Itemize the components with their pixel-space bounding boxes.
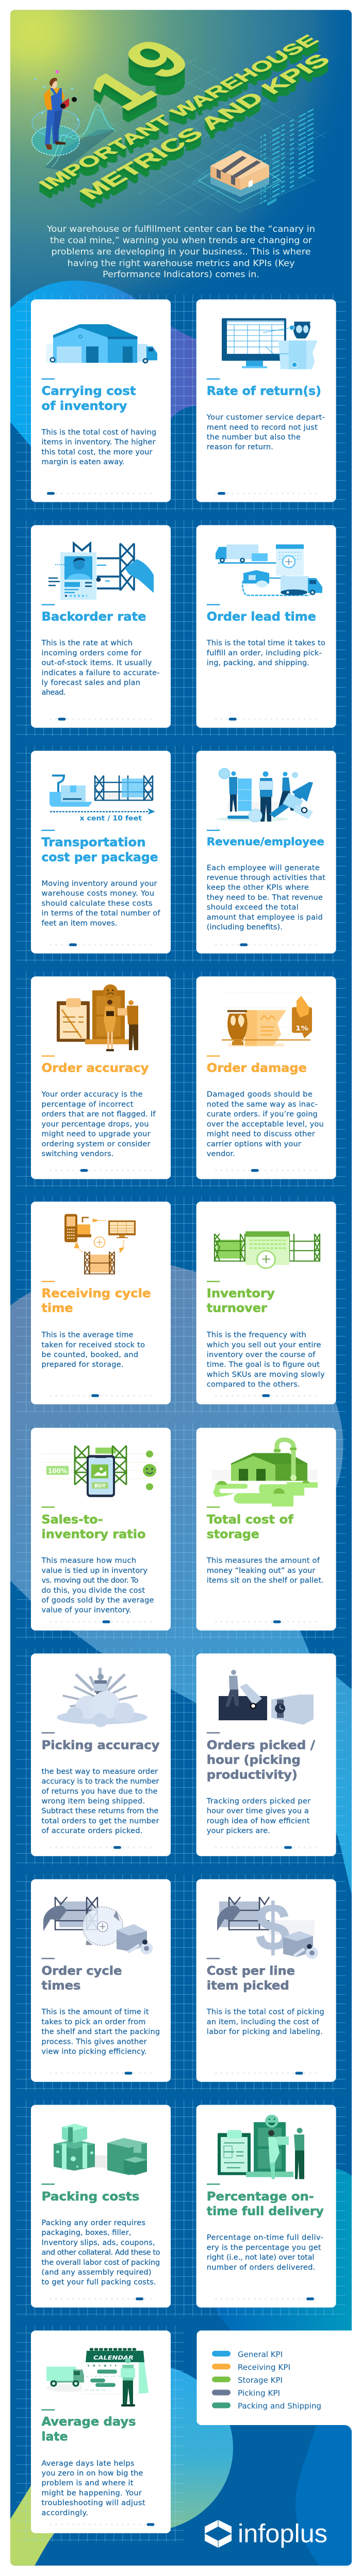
body text <box>207 1091 324 1158</box>
progress dots <box>51 2072 151 2075</box>
body text <box>41 1091 156 1158</box>
body text: total orders to get the number <box>41 1817 159 1825</box>
icon: worker with hand truck and wristwatch <box>219 1670 314 1725</box>
progress dots <box>51 1169 151 1172</box>
heading <box>207 1286 275 1315</box>
body text: Moving inventory around your <box>41 880 157 888</box>
body text: ment need to record not just <box>207 423 318 432</box>
intro text: Your warehouse or fulfillment center can be the “canary in <box>46 224 315 234</box>
body text <box>206 1557 324 1585</box>
card: order cycle times <box>31 1879 171 2082</box>
icon: truck, calendar and worker: 4 7 8 9 10 11 12 <box>86 2375 123 2378</box>
heading: inventory ratio <box>41 1527 145 1541</box>
body text: indicates a failure to accurate- <box>41 669 160 677</box>
body text <box>41 1331 145 1369</box>
body text: in terms of the total number of <box>41 909 160 918</box>
body text: the best way to measure order <box>41 1768 158 1776</box>
heading <box>207 2189 324 2218</box>
body text: Damaged goods should be <box>207 1091 313 1099</box>
progress dots <box>216 2072 316 2075</box>
body text: of returns you have due to the <box>41 1788 158 1795</box>
body text: time. The goal is to figure out <box>207 1361 320 1369</box>
body text: which SKUs are moving slowly <box>207 1371 325 1379</box>
body text: an item, including the cost of <box>207 2018 319 2026</box>
heading: Cost per line <box>207 1963 295 1978</box>
body text: This is the total cost of having <box>41 429 156 436</box>
body text: process. This gives another <box>41 2038 147 2046</box>
title block: 19 <box>69 27 209 121</box>
heading: Average days <box>41 2414 136 2429</box>
body text: orders that are not flagged. If <box>41 1110 156 1118</box>
progress dots <box>216 492 316 495</box>
body text: warehouse costs money. You <box>41 890 154 898</box>
legend <box>197 2331 361 2432</box>
illustration: pallet of boxes <box>192 144 315 212</box>
intro text: the coal mine,” warning you when trends are changing or <box>50 235 313 246</box>
icon: truck, calendar and worker: 27 28 29 30 <box>85 2389 105 2392</box>
body text: This measures the amount of <box>206 1557 320 1565</box>
body text: the number but also the <box>207 433 301 442</box>
body text: feet an item moves. <box>41 920 118 927</box>
legend: Packing and Shipping <box>238 2401 321 2411</box>
body text: out-of-stock items. It usually <box>41 659 152 667</box>
icon: rack, dollar sign and box: $ <box>255 1890 290 1965</box>
body text <box>41 2219 160 2286</box>
icon: clipboard, door and delivery <box>57 985 138 1051</box>
icon: gift boxes and cartons <box>54 2124 147 2175</box>
progress dots <box>51 943 151 946</box>
progress dots <box>51 1846 151 1849</box>
body text: This is the amount of time it <box>41 2008 149 2016</box>
progress dots <box>216 1394 316 1397</box>
body text: revenue through activities that <box>207 874 325 882</box>
card: orders picked per hour <box>196 1653 336 1856</box>
body text: curate orders. if you’re going <box>207 1110 318 1118</box>
heading: Transportation <box>41 835 145 850</box>
icon: broken vase, box and 1% marker: 1% <box>296 1025 308 1032</box>
body text: value of your inventory. <box>41 1606 131 1615</box>
body text: accuracy is to track the number <box>41 1777 159 1786</box>
heading <box>41 835 158 864</box>
progress dots <box>47 492 151 495</box>
body text: Your order accuracy is the <box>41 1091 143 1099</box>
heading: Order lead time <box>207 609 316 623</box>
body text: accordingly. <box>41 2509 88 2517</box>
heading: item picked <box>207 1978 289 1993</box>
body text: should exceed the total <box>207 904 299 912</box>
body text: percentage of incorrect <box>41 1100 134 1109</box>
body text: Average days late helps <box>41 2460 134 2468</box>
card: backorder rate <box>31 525 171 728</box>
heading: productivity) <box>207 1768 298 1782</box>
body text: over the acceptable level, you <box>207 1121 324 1128</box>
body text: inventory over the course of <box>207 1351 316 1359</box>
body text: might be happening. Your <box>41 2489 142 2497</box>
body text <box>41 880 160 927</box>
body text: vendor. <box>207 1150 235 1158</box>
card: packing costs <box>31 2105 171 2308</box>
body text: ly forecast sales and plan <box>41 679 140 687</box>
heading: Picking accuracy <box>41 1738 160 1752</box>
body text: prepared for storage. <box>41 1361 124 1369</box>
body text: fulfill an order, including pick- <box>207 649 322 657</box>
icon: rack, ID card and hand <box>48 544 154 600</box>
card: average days late <box>31 2331 171 2533</box>
heading: Total cost of <box>207 1512 294 1527</box>
intro text: problems are developing in your business.. This is where <box>52 247 310 257</box>
body text: This is the total time it takes to <box>206 639 325 648</box>
card: order damage <box>196 976 336 1179</box>
body text: your percentage drops, you <box>41 1121 149 1128</box>
icon: rack, phone, 100% tag and faces: 100% <box>48 1467 67 1475</box>
body text: This is the rate at which <box>41 639 133 648</box>
title: metrics and kpis: METRICS AND KPIS <box>74 50 336 203</box>
body text: and other collateral. Add these to <box>41 2249 160 2257</box>
card: order lead time <box>196 525 336 728</box>
heading: Packing costs <box>41 2189 139 2204</box>
progress dots <box>216 2297 316 2300</box>
icon: scanner, monitor and rack cycle <box>64 1214 136 1274</box>
body text: compared to the others. <box>207 1381 300 1389</box>
intro text <box>46 224 315 280</box>
icon: worker on cloud with rays <box>57 1668 147 1727</box>
card: sales to inventory ratio <box>31 1428 171 1631</box>
body text: do this, you divide the cost <box>41 1587 145 1595</box>
heading <box>41 1963 122 1993</box>
heading: Sales-to- <box>41 1512 103 1527</box>
body text: number of orders delivered. <box>207 2264 315 2272</box>
heading <box>207 1963 295 1993</box>
icon: clipboard, door and happy delivery <box>218 2115 304 2179</box>
progress dots <box>216 718 316 720</box>
body text: This is the average time <box>41 1331 134 1340</box>
body text: margin is eaten away. <box>41 458 125 466</box>
heading: Carrying cost <box>41 384 136 398</box>
icon: leaking warehouse <box>212 1439 318 1506</box>
heading: time <box>41 1301 73 1315</box>
body text: value is tied up in inventory <box>41 1567 148 1575</box>
body text: problem is and where it <box>41 2479 134 2487</box>
body text: troubleshooting will adjust <box>41 2499 145 2507</box>
body text: of accurate orders picked. <box>41 1827 142 1835</box>
body text: incoming orders come for <box>41 649 142 657</box>
body text: ahead. <box>41 689 65 697</box>
title block <box>0 0 361 297</box>
progress dots <box>216 1169 316 1172</box>
heading <box>41 1512 145 1541</box>
body text: Each employee will generate <box>207 864 320 872</box>
body text: ing, packing, and shipping. <box>207 659 309 667</box>
heading <box>207 1738 315 1782</box>
body text: you zero in on how big the <box>41 2469 143 2478</box>
heading: Percentage on- <box>207 2189 314 2204</box>
intro text: having the right warehouse metrics and KPIs (Key <box>67 259 295 268</box>
heading: Orders picked / <box>207 1738 315 1752</box>
heading: Order cycle <box>41 1963 122 1978</box>
legend: Storage KPI <box>238 2375 283 2385</box>
body text <box>41 1768 159 1835</box>
body text: switching vendors. <box>41 1150 113 1158</box>
card: percentage on-time full delivery <box>196 2105 336 2308</box>
icon: truck, calendar and worker: CALENDAR <box>93 2354 134 2361</box>
body text: vs. moving out the door. To <box>41 1577 138 1585</box>
body text: rough idea of how efficient <box>207 1817 310 1825</box>
body text: which you sell out your entire <box>207 1341 321 1349</box>
intro text: Performance Indicators) comes in. <box>103 269 259 280</box>
card: revenue per employee <box>196 751 336 954</box>
heading: hour (picking <box>207 1753 301 1767</box>
progress dots <box>216 943 316 946</box>
heading <box>41 1286 151 1315</box>
body text: This measure how much <box>41 1557 136 1565</box>
body text: packaging, boxes, filler, <box>41 2229 131 2237</box>
heading: of inventory <box>41 399 127 413</box>
body text: amount that employee is paid <box>207 913 323 922</box>
icon: trucks, calendar and delivery route <box>216 545 322 596</box>
heading: turnover <box>207 1301 267 1315</box>
body text: wrong item being shipped. <box>41 1798 145 1805</box>
heading: Revenue/employee <box>207 836 324 848</box>
body text: view into picking efficiency. <box>41 2048 146 2056</box>
body text <box>206 639 325 667</box>
body text: be counted, booked, and <box>41 1351 138 1359</box>
body text: (and any assembly required) <box>41 2268 152 2277</box>
progress dots <box>51 1394 151 1397</box>
heading: Order damage <box>207 1061 307 1075</box>
body text: (including benefits). <box>207 923 283 931</box>
body text: reason for return. <box>207 443 273 451</box>
heading: late <box>41 2429 68 2444</box>
card: transportation cost per package <box>31 751 171 954</box>
body text: this total cost, the more your <box>41 448 153 456</box>
body text: should calculate these costs <box>41 900 153 908</box>
body text <box>41 1557 154 1615</box>
body text: money “leaking out” as your <box>207 1567 315 1575</box>
heading: cost per package <box>41 850 158 864</box>
body text: the overall labor cost of packing <box>41 2259 160 2267</box>
progress dots <box>51 2297 151 2300</box>
icon: pallet jack and rack with cost arrow <box>50 775 155 823</box>
body text: ery is the percentage you get <box>207 2244 321 2252</box>
card: receiving cycle time <box>31 1201 171 1404</box>
body text <box>41 2008 160 2056</box>
body text: might need to discuss other <box>207 1130 315 1138</box>
body text: items sit on the shelf or pallet. <box>207 1577 324 1585</box>
icon: broken vase, box and 1% marker <box>222 993 312 1047</box>
heading: storage <box>207 1527 259 1541</box>
body text: your pickers are. <box>207 1827 270 1835</box>
icon: rack, phone, 100% tag and faces: BUY <box>94 1483 106 1489</box>
heading: times <box>41 1978 81 1993</box>
heading: time full delivery <box>207 2204 324 2218</box>
heading: Order accuracy <box>41 1061 149 1075</box>
body text <box>206 414 325 451</box>
heading: Rate of return(s) <box>207 384 321 398</box>
body text: This is the total cost of picking <box>206 2008 324 2016</box>
icon: pallet jack and rack with cost arrow: x cent / 10 feet <box>79 815 142 823</box>
body text: labor for picking and labeling. <box>207 2028 323 2036</box>
card: order accuracy <box>31 976 171 1179</box>
body text: noted the same way as inac- <box>207 1100 318 1109</box>
body text: they need to be. That revenue <box>207 894 323 902</box>
legend: General KPI <box>238 2349 283 2359</box>
heading: Inventory <box>207 1286 275 1300</box>
title: important warehouse: IMPORTANT WAREHOUSE <box>35 32 323 193</box>
icon: hand, rack, cycle clock and box <box>43 1897 153 1954</box>
progress dots <box>216 1620 316 1623</box>
body text: ordering system or consider <box>41 1140 151 1148</box>
body text <box>41 639 160 697</box>
body text: keep the other KPIs where <box>207 884 309 892</box>
body text: Packing any order requires <box>41 2219 145 2227</box>
body text: might need to upgrade your <box>41 1130 151 1138</box>
icon: racks, calendar and clock <box>215 1231 320 1268</box>
card: picking accuracy <box>31 1653 171 1856</box>
body text <box>206 2008 324 2036</box>
card: rate of returns <box>196 299 336 502</box>
card: carrying cost of inventory <box>31 299 171 502</box>
body text: hour over time gives you a <box>207 1807 309 1816</box>
body text <box>41 2460 145 2517</box>
icon: monitor table and returned box <box>222 318 318 369</box>
card: total cost of storage <box>196 1428 336 1631</box>
legend: Picking KPI <box>238 2388 280 2398</box>
icon: truck, calendar and worker: S M T W T F <box>88 2365 117 2368</box>
progress dots <box>51 2523 155 2526</box>
body text: items in inventory. The higher <box>41 438 156 447</box>
progress dots <box>216 1846 316 1849</box>
icon: rack, phone, 100% tag and faces <box>42 1446 159 1497</box>
body text: Tracking orders picked per <box>206 1798 310 1805</box>
heading <box>207 1512 294 1541</box>
body text: of goods sold by the average <box>41 1597 154 1604</box>
icon: truck, calendar and worker <box>46 2349 149 2406</box>
progress dots <box>51 718 151 720</box>
body text <box>41 429 156 466</box>
body text: carrier options with your <box>207 1140 301 1148</box>
body text: Percentage on-time full deliv- <box>207 2234 323 2242</box>
body text: to get your full packing costs. <box>41 2278 156 2286</box>
logo: infoplus: infoplus <box>238 2519 327 2548</box>
heading <box>41 384 136 413</box>
body text <box>206 1331 325 1389</box>
body text: takes to pick an order from <box>41 2018 145 2026</box>
body text: right (i.e., not late) over total <box>207 2253 314 2262</box>
body text <box>207 864 325 931</box>
icon: employees, boxes, coins and growth arrow <box>217 768 313 822</box>
body text: Inventory slips, ads, coupons, <box>41 2239 155 2247</box>
body text <box>206 1798 310 1835</box>
body text: Your customer service depart- <box>206 414 325 422</box>
icon: rack, dollar sign and box <box>217 1890 318 1965</box>
progress dots <box>51 1620 151 1623</box>
body text: taken for received stock to <box>41 1341 145 1349</box>
heading: Backorder rate <box>41 609 146 623</box>
illustration: worker with clipboard and chart <box>32 70 117 171</box>
heading: Receiving cycle <box>41 1286 151 1300</box>
body text <box>207 2234 323 2272</box>
card: inventory turnover <box>196 1201 336 1404</box>
body text: the shelf and start the packing <box>41 2028 160 2036</box>
body text: Subtract these returns from the <box>41 1807 159 1816</box>
icon: warehouse and truck <box>46 324 157 364</box>
card: cost per line item picked <box>196 1879 336 2082</box>
legend: Receiving KPI <box>238 2362 290 2372</box>
heading <box>41 2414 136 2444</box>
body text: This is the frequency with <box>206 1331 306 1340</box>
illustration: data columns <box>260 108 314 206</box>
